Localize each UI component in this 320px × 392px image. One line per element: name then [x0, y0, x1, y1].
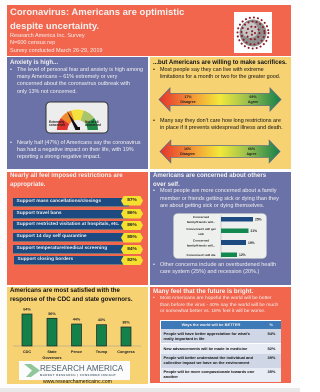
website url: www.researchamericainc.com — [43, 379, 112, 385]
bar chart: concerns: 25% — [254, 218, 261, 222]
heading: Anxiety is high... — [10, 60, 58, 66]
text block: family and friends: are about getting sick or dying themselves. — [160, 203, 264, 209]
text block: negative impact: reporting a strong negative impact. — [17, 154, 101, 160]
bar chart: concerns: 19% — [248, 241, 254, 245]
text block: limitations: Most people say they can live with extreme — [160, 67, 264, 73]
text block: family and friends: • — [153, 188, 155, 194]
text block: negative impact: has had a negative impact on their life, with 19% — [17, 147, 134, 153]
heading: appropriate. — [10, 181, 46, 188]
gauge chart: concerned — [85, 122, 101, 126]
text block: negative impact: • — [10, 140, 12, 146]
text block: hopeful: • — [153, 296, 155, 301]
support list chart: 82% — [127, 258, 137, 263]
table: ways the world will be better — [160, 320, 281, 382]
bar chart: satisfaction: 64% — [23, 307, 31, 311]
gauge chart — [46, 102, 108, 134]
arrow chart: 17% disagree 69% agree: Disagree — [180, 100, 196, 104]
logo tagline: MARKET RESEARCH | CONSUMER INSIGHT — [40, 373, 116, 377]
arrow chart: 17% disagree 69% agree — [158, 87, 282, 112]
panel: concerned about others — [150, 172, 291, 285]
heading: ...but Americans are willing to make sacrifices. — [153, 60, 287, 66]
icon: logo arrow — [24, 364, 40, 377]
bar chart: satisfaction: 38% — [122, 320, 130, 324]
icon: virus image — [234, 12, 272, 53]
table: ways the world will be better: really important in life — [164, 336, 204, 341]
logo wordmark: RESEARCH AMERICA — [40, 364, 123, 372]
text block: limitations: • — [153, 67, 155, 73]
bar chart: satisfaction: Governors — [42, 356, 62, 360]
support list chart: 84% — [127, 247, 137, 252]
text block: hopeful: than before the virus - 40% say the world will be much — [160, 303, 278, 308]
heading: Americans are most satisfied with the — [10, 287, 120, 294]
bar chart: concerns: sick — [197, 232, 204, 236]
gauge chart: Not at all — [85, 120, 99, 124]
bar chart: satisfaction: Trump — [96, 350, 108, 354]
bar chart: concerns: family/friends will... — [186, 220, 215, 224]
title: despite uncertainty. — [10, 21, 99, 32]
heading: Americans are concerned about others — [153, 172, 266, 179]
arrow chart: 17% disagree 69% agree: 69% — [249, 94, 257, 98]
heading — [10, 287, 133, 303]
bar chart: concerns — [173, 213, 267, 259]
survey details: Survey conducted March 26-29, 2019 — [10, 48, 103, 54]
text block: other concerns: • — [153, 262, 155, 268]
header banner — [7, 5, 291, 56]
bar chart: concerns: family/friends will... — [186, 243, 215, 247]
text block: how long: in place if it prevents widespread illness and death. — [160, 125, 283, 131]
text block: how long — [153, 118, 283, 131]
panel: restrictions appropriate — [7, 172, 148, 285]
text block: limitations — [153, 67, 280, 80]
table: ways the world will be better: Ways the world will be BETTER — [182, 322, 240, 326]
bar chart: satisfaction: State — [47, 350, 57, 354]
bar chart: satisfaction: Congress — [117, 350, 135, 354]
text block: fear level: • — [10, 67, 12, 73]
text block: family and friends — [153, 188, 279, 209]
text block: other concerns — [153, 262, 276, 275]
arrow chart: 16% disagree 66% agree: Agree — [246, 152, 257, 156]
bar chart: concerns: 21% — [250, 229, 257, 233]
support list chart: 86% — [127, 222, 137, 228]
support list chart: 86% — [127, 211, 137, 216]
bar chart: satisfaction: Pence — [71, 350, 82, 354]
bar chart: concerns: Concerned — [192, 238, 209, 242]
text block: negative impact — [10, 140, 141, 160]
text block: hopeful: Most Americans are hopeful the world will be better — [160, 296, 272, 301]
heading — [153, 172, 266, 188]
title — [10, 7, 184, 32]
text block: family and friends: member or friends getting sick or dying than they — [160, 196, 279, 202]
arrow chart: 16% disagree 66% agree — [160, 139, 280, 164]
panel: future is bright — [150, 287, 291, 383]
arrow chart: 17% disagree 69% agree: Agree — [248, 100, 258, 104]
survey details — [10, 33, 103, 54]
table: ways the world will be better: New advancements will be made in medicine — [164, 346, 247, 351]
arrow chart: 16% disagree 66% agree: 66% — [248, 147, 256, 151]
heading: response of the CDC and state governors. — [10, 296, 133, 303]
table: ways the world will be better: People will better understand the individual and — [164, 355, 253, 360]
arrow chart: 16% disagree 66% agree: 16% — [184, 147, 192, 151]
table: ways the world will be better: 35% — [268, 369, 275, 374]
bar chart: concerns: Concerned I will get — [186, 227, 215, 231]
support list chart: Support mass cancellations/closings — [16, 199, 101, 204]
heading — [10, 172, 123, 188]
table: ways the world will be better: 52% — [268, 346, 275, 351]
bar chart: satisfaction: 56% — [48, 312, 56, 316]
support list chart: Support temperature/medical screening — [16, 246, 107, 251]
text block: fear level: concerned about the coronavirus outbreak with — [17, 81, 130, 87]
bar chart: concerns: 12% — [238, 253, 245, 257]
table: ways the world will be better: % — [269, 322, 273, 326]
bar chart: satisfaction: 43% — [98, 318, 106, 322]
text block: limitations: limitations for a month or two for the greater good. — [160, 74, 280, 80]
heading: over self. — [153, 181, 180, 188]
bottom page edge — [0, 388, 300, 392]
panel: willing to make sacrifices — [150, 57, 291, 169]
text block: negative impact: Nearly half (47%) of Americans say the coronavirus — [17, 140, 141, 146]
text block: hopeful — [153, 296, 278, 314]
support list chart: Support closing borders — [18, 257, 73, 262]
text block: how long: • — [153, 118, 155, 124]
support list chart — [13, 196, 143, 265]
bar chart: concerns: Concerned I will die — [186, 253, 215, 257]
panel: satisfaction with response — [7, 287, 148, 384]
table: ways the world will be better: 54% — [268, 331, 275, 336]
bar chart: satisfaction: CDC — [23, 350, 31, 354]
table: ways the world will be better: 39% — [268, 355, 275, 360]
bar chart: satisfaction: 44% — [73, 318, 81, 322]
table: ways the world will be better: People will be more compassionate towards one — [164, 369, 254, 374]
support list chart: 87% — [127, 198, 137, 203]
support list chart: Support 14 day self quarantine — [16, 234, 87, 239]
text block: fear level: many Americans – 61% extremely or very — [17, 74, 117, 80]
table: ways the world will be better: another — [164, 374, 178, 379]
panel: anxiety is high — [7, 57, 148, 169]
logo: Research America — [19, 361, 130, 380]
table: ways the world will be better: collective impact we have on the environment — [164, 360, 249, 365]
arrow chart: 17% disagree 69% agree: 17% — [184, 94, 192, 98]
text block: fear level: only 13% not concerned. — [17, 89, 77, 95]
bar chart: concerns: Concerned — [192, 215, 209, 219]
text block: hopeful: or somewhat better vs. 18% feel it will be worse. — [160, 309, 265, 314]
title: Coronavirus: Americans are optimistic — [10, 7, 184, 18]
survey details: Research America Inc. Survey — [10, 33, 85, 39]
heading: Many feel that the future is bright. — [153, 288, 253, 295]
survey details: N=600 census rep — [10, 40, 55, 46]
text block: other concerns: Other concerns include an overburdened health — [160, 262, 276, 268]
heading: Nearly all feel imposed restrictions are — [10, 172, 123, 179]
support list chart: Support restricted visitation at hospitals, etc. — [16, 222, 119, 227]
gauge chart: concerned — [49, 122, 65, 126]
text block: family and friends: Most people are more concerned about a family — [160, 188, 276, 194]
support list chart: 85% — [127, 235, 137, 240]
bar chart: satisfaction — [13, 307, 141, 360]
text block: fear level — [10, 67, 143, 95]
text block: how long: Many say they don’t care how long restrictions are — [160, 118, 281, 124]
table: ways the world will be better: People will have better appreciation for what’s — [164, 331, 250, 336]
text block: other concerns: care system (25%) and recession (20%.) — [160, 269, 259, 275]
support list chart: Support travel bans — [16, 211, 62, 216]
arrow chart: 16% disagree 66% agree: Disagree — [180, 152, 195, 156]
text block: fear level: The level of personal fear and anxiety is high among — [17, 67, 143, 73]
gauge chart: Extremely — [49, 120, 64, 124]
